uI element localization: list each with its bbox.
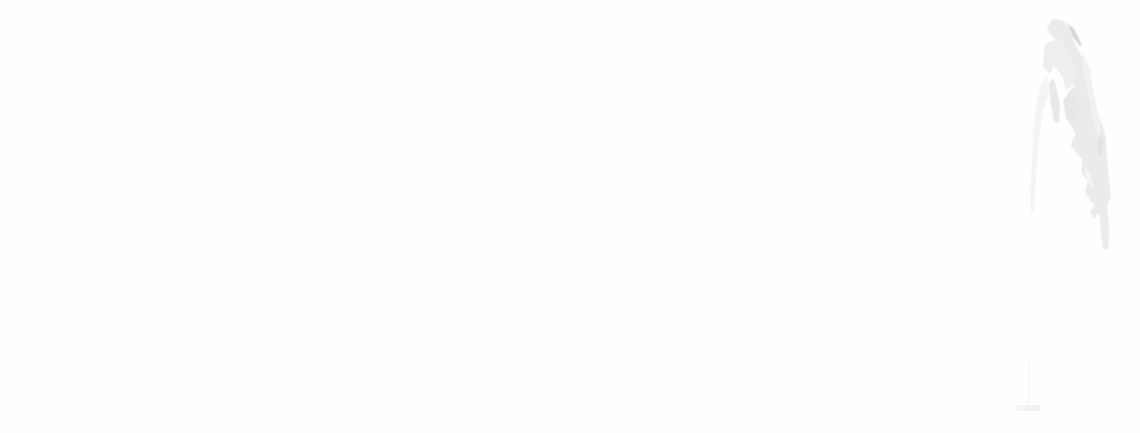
fountain base [1017,405,1040,411]
fountain pole [1028,362,1030,406]
water jet: darker top edge stripe [1067,23,1082,46]
water jet: main spray mass [1043,19,1111,249]
water jet: left thin stream [1030,76,1049,213]
